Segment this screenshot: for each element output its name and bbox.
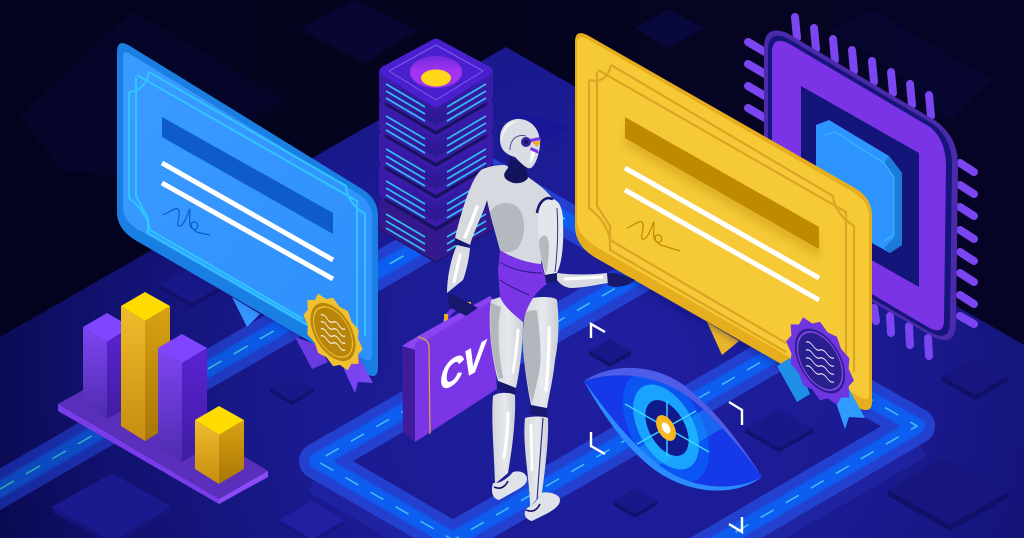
server top [384, 43, 488, 103]
torso shade [490, 203, 524, 252]
robot [447, 119, 635, 521]
chip window [801, 86, 919, 287]
eye pupil [645, 390, 689, 466]
chip pins [748, 17, 974, 356]
robot head [500, 119, 541, 168]
briefcase front [415, 302, 497, 442]
robot back leg [490, 297, 527, 500]
robot neck [504, 157, 528, 183]
road: circuit loop [317, 272, 917, 538]
blue certificate [117, 43, 378, 393]
robot right upper arm [537, 198, 563, 283]
bar four [195, 420, 219, 484]
server stack [379, 43, 493, 263]
signature [627, 222, 680, 251]
eye scan lines [625, 401, 709, 456]
CV briefcase [402, 296, 497, 442]
briefcase label: CV [440, 332, 487, 400]
robot front leg [523, 297, 560, 521]
briefcase handle [445, 307, 469, 323]
chip core [816, 120, 902, 253]
server layers [382, 72, 490, 258]
purple seal ribbons [777, 358, 810, 402]
blue seal [304, 282, 362, 382]
bar one [83, 327, 107, 419]
road: left branch to server [0, 235, 440, 495]
arm highlight [465, 207, 477, 237]
certificate border [129, 72, 365, 336]
signature [163, 209, 210, 235]
yellow certificate [575, 33, 872, 429]
robot far arm [557, 273, 635, 288]
scan corner brackets [591, 324, 742, 532]
chip processor [748, 17, 974, 356]
certificate body [117, 43, 378, 376]
text lines [625, 168, 819, 300]
briefcase top [402, 296, 496, 350]
certificate body [575, 33, 872, 410]
briefcase strap [418, 337, 430, 434]
bar two [121, 306, 145, 441]
eye scanner [584, 368, 762, 490]
road: back branch behind robot [440, 147, 640, 262]
heading bar shadow [625, 125, 819, 258]
robot visor [530, 137, 541, 142]
text lines [162, 163, 333, 279]
purple seal [787, 304, 853, 418]
heading bar [162, 117, 333, 234]
bar three [158, 348, 182, 462]
robot pelvis [498, 250, 547, 322]
ground plates [52, 110, 1008, 538]
eye shape [584, 368, 762, 491]
robot near forearm [447, 238, 478, 316]
certificate border [589, 65, 854, 372]
chart base [58, 375, 268, 499]
briefcase side [402, 340, 420, 442]
faint background plates [20, 0, 992, 180]
server vent stripes [386, 84, 486, 251]
blue seal ribbons [295, 337, 328, 369]
robot torso and near upper arm [455, 165, 552, 264]
bar chart [58, 292, 268, 504]
heading bar [625, 117, 819, 249]
